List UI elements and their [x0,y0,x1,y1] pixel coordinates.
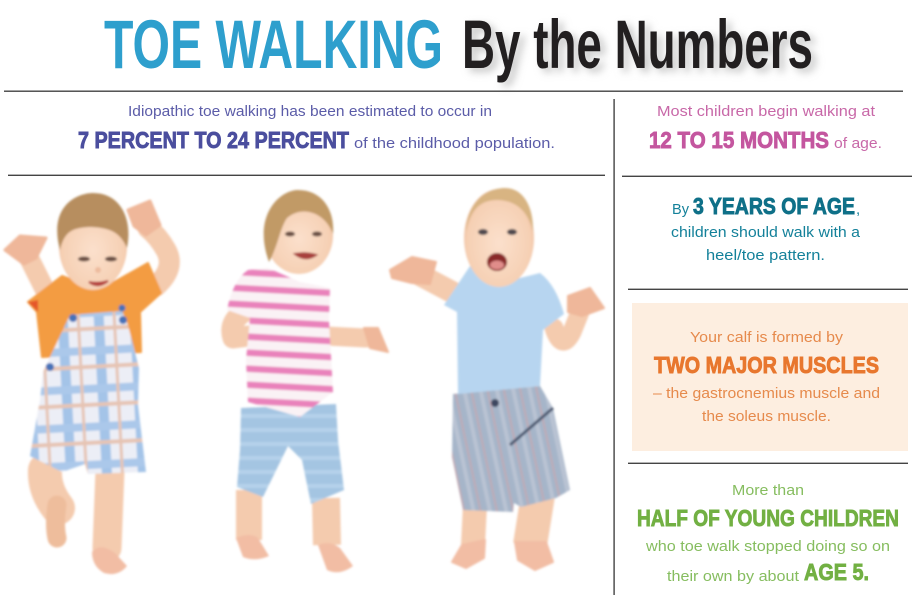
title [104,6,818,87]
arms [420,275,452,292]
panel: calf muscles [632,303,908,451]
stat: three years of age: 3 YEARS OF AGE [693,193,855,219]
stat: half of young children: AGE 5. [804,559,869,585]
panel: calf muscles: – the gastrocnemius muscle and [653,385,880,402]
stat: half of young children: their own by about [667,568,800,585]
striped shirt [227,268,333,417]
stat: begin walking: 12 TO 15 MONTHS [649,127,829,153]
stat: three years of age: children should walk with a [671,224,861,241]
illustration: baby in blue shirt [390,188,604,570]
legs [473,505,475,545]
stat: childhood population [78,103,555,153]
arms [26,252,46,292]
head [464,189,534,287]
panel: calf muscles: Your calf is formed by [690,329,844,346]
legs [236,490,262,540]
panel: calf muscles: the soleus muscle. [702,408,831,425]
head [59,202,127,290]
stat: three years of age: heel/toe pattern. [706,247,825,264]
stat: three years of age: By [672,201,689,218]
arms [232,312,272,338]
illustration: baby in striped shirt [227,190,388,572]
stat: childhood population: 7 PERCENT TO 24 PERCENT [78,127,350,153]
hands [5,236,46,264]
stat: begin walking: Most children begin walking at [657,103,876,120]
title: toe walking: TOE WALKING [104,6,443,83]
overalls [30,311,146,474]
shorts [237,404,344,504]
head [265,196,333,274]
stat: childhood population: of the childhood population. [354,135,555,152]
stat: half of young children [637,482,899,585]
illustration: baby in plaid overalls [5,193,169,574]
stat: begin walking: of age. [834,135,882,152]
shorts [452,386,570,512]
stat: half of young children: who toe walk stopped doing so on [645,538,890,555]
orange shirt [28,263,161,357]
stat: begin walking [649,103,882,153]
legs [45,470,58,508]
stat: childhood population: Idiopathic toe walking has been estimated to occur in [128,103,492,120]
stat: three years of age [671,193,861,264]
stat: three years of age: , [856,201,860,218]
blue shirt [444,266,564,394]
stat: half of young children: More than [732,482,804,499]
